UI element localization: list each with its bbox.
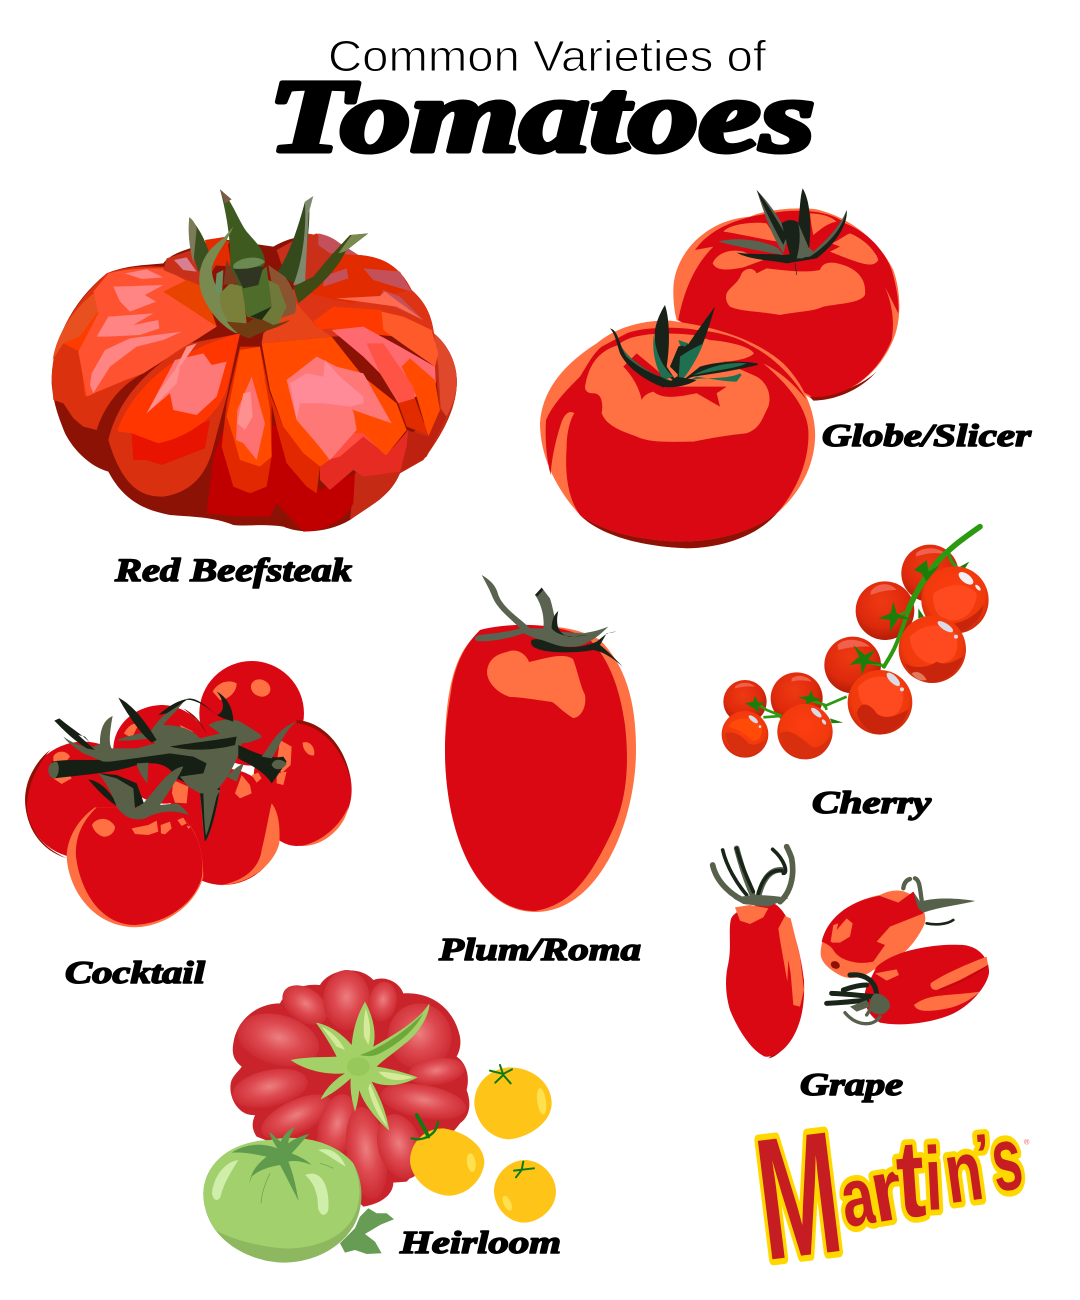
logo: Martin's: ’ xyxy=(972,1122,993,1186)
logo: Martin's: s xyxy=(985,1107,1028,1211)
green tomato calyx xyxy=(232,1127,312,1200)
title xyxy=(268,32,815,174)
front globe tomato xyxy=(540,305,815,548)
plum calyx xyxy=(475,575,623,667)
upper lying grape tomato xyxy=(821,878,975,978)
label: Cherry: Cherry xyxy=(812,784,932,820)
label: Heirloom: Heirloom xyxy=(399,1224,561,1260)
vine stem xyxy=(745,527,980,723)
logo: Martin's: M xyxy=(747,1094,850,1297)
label: Plum/Roma: Plum/Roma xyxy=(438,931,641,967)
cocktail vine and calyx xyxy=(48,692,297,842)
label: Cocktail: Cocktail xyxy=(65,954,205,990)
label: Grape: Grape xyxy=(800,1066,903,1102)
label: Globe/Slicer: Globe/Slicer xyxy=(822,417,1032,453)
heirloom green calyx xyxy=(291,1002,429,1131)
illustration: heirloom tomatoes xyxy=(203,970,556,1263)
leaf xyxy=(340,1208,394,1254)
green tomato xyxy=(203,1127,361,1263)
illustration: grape tomatoes xyxy=(713,847,989,1058)
illustration: cocktail tomatoes on the vine xyxy=(25,661,352,927)
illustration: red beefsteak tomato xyxy=(52,189,457,532)
yellow tomato with stem xyxy=(410,1115,484,1196)
large pink heirloom tomato xyxy=(229,970,469,1207)
back globe calyx xyxy=(718,188,847,275)
yellow tomato lower right xyxy=(494,1160,556,1223)
logo: Martin's: a xyxy=(833,1149,882,1245)
title line: Common Varieties of: Common Varieties of xyxy=(328,32,767,81)
front globe calyx xyxy=(610,305,758,387)
title line: Tomatoes: Tomatoes xyxy=(268,59,815,174)
illustration: cherry tomatoes on the vine xyxy=(722,527,989,759)
logo: Martin's xyxy=(747,1094,1030,1297)
logo: Martin's: r xyxy=(862,1139,910,1241)
lower lying grape tomato xyxy=(827,945,989,1024)
logo: Martin's: i xyxy=(922,1129,945,1230)
logo: Martin's: t xyxy=(892,1117,929,1241)
yellow tomato upper right xyxy=(474,1065,552,1139)
back globe tomato xyxy=(673,188,899,401)
logo: Martin's: ® xyxy=(1024,1137,1030,1146)
label: Red Beefsteak: Red Beefsteak xyxy=(114,553,353,589)
upright grape tomato xyxy=(713,847,804,1058)
illustration: plum roma tomato xyxy=(445,575,636,912)
logo: Martin's: n xyxy=(939,1121,988,1222)
illustration: globe slicer tomatoes xyxy=(540,188,899,548)
